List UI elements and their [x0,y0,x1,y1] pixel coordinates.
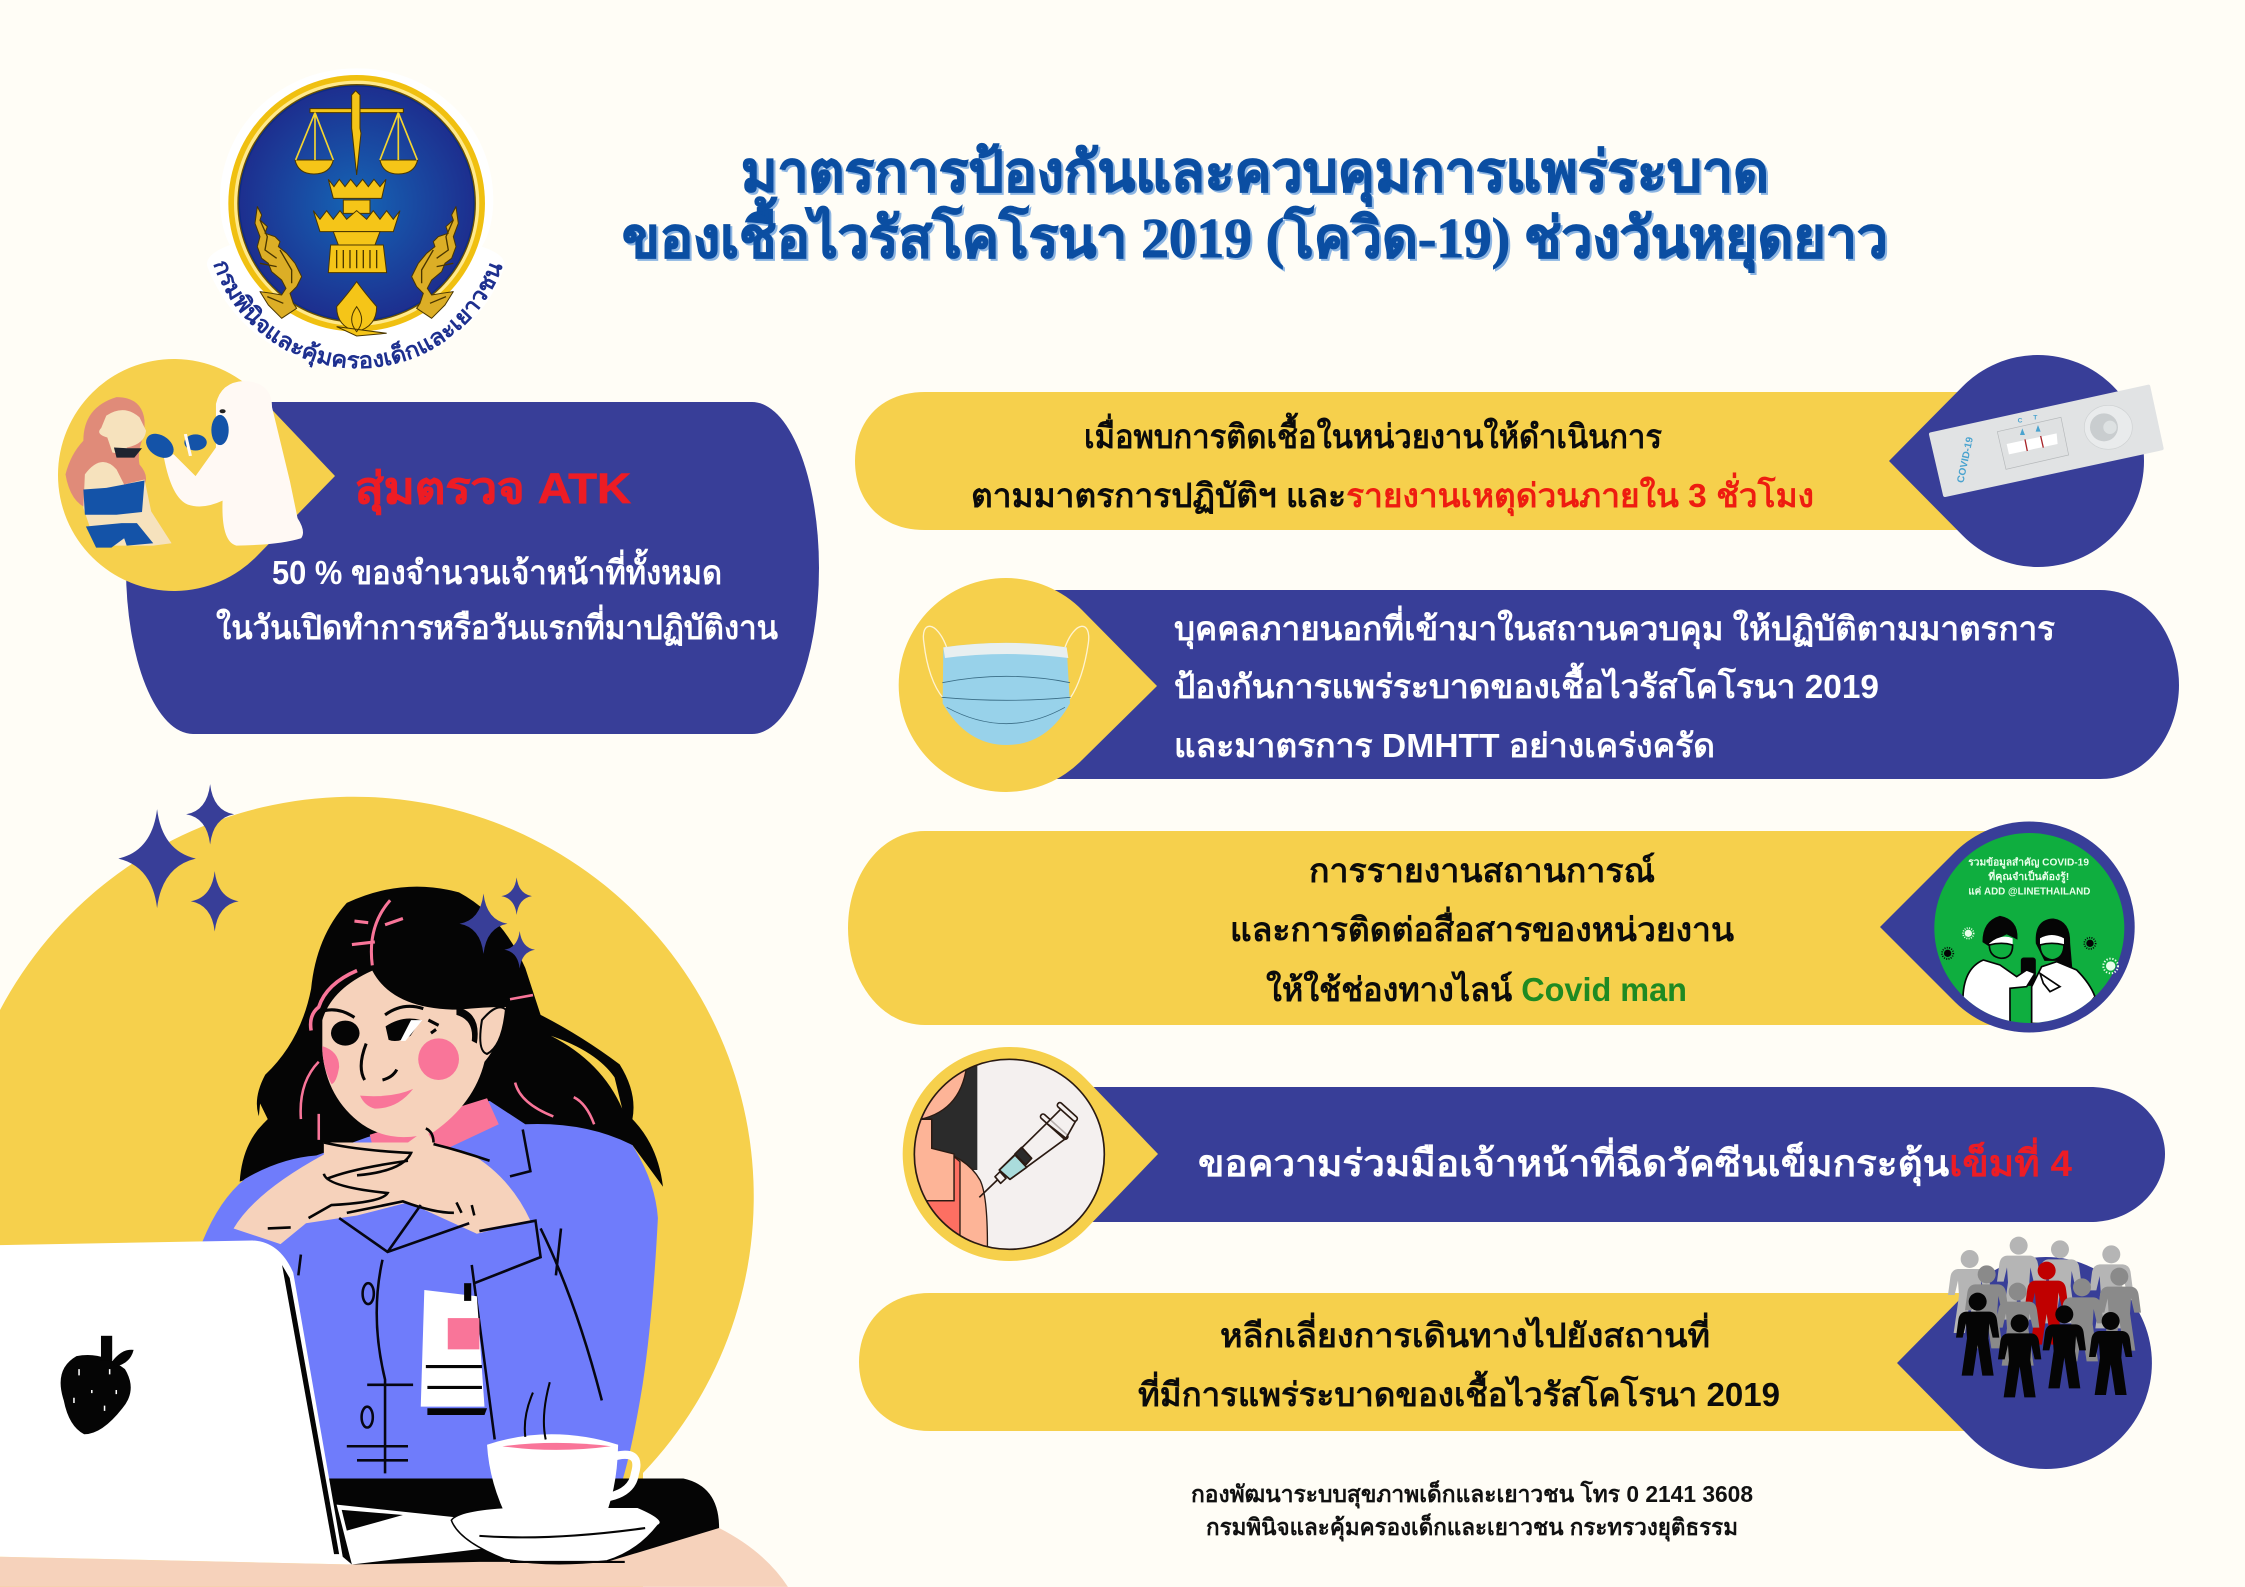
title [622,142,1888,273]
row 2: outsiders DMHTT [899,578,2179,792]
blue pill [1050,590,2179,779]
text block: ที่มีการแพร่ระบาดของเชื้อไวรัสโคโรนา 2019 [1138,1370,1780,1413]
icon: crowd [1948,1237,2141,1397]
collar and shirt lines [298,1129,602,1473]
yellow pill [859,1293,2000,1431]
hands [234,1129,530,1244]
heading: สุ่มตรวจ ATK [355,465,631,516]
icon: LINE poster: รวมข้อมูลสำคัญ COVID-19 [1968,856,2089,869]
laptop lid [0,1240,352,1565]
row 4: booster vaccine [903,1047,2165,1261]
text block: ตามมาตรการปฏิบัติฯ และรายงานเหตุด่วนภายใน 3 ชั่วโมง [971,472,1814,517]
icon: swab test illustration [66,381,303,548]
message text: ขอความร่วมมือเจ้าหน้าที่ฉีดวัคซีนเข็มกระตุ้น เข็มที่ 4 [1198,1137,2072,1187]
sparkle stars [118,784,535,969]
neck and face [370,1098,499,1148]
text block: การรายงานสถานการณ์ [1309,852,1655,889]
cheeks [418,1038,459,1080]
icon: ATK test kit: COVID-19 [1955,436,1976,484]
yellow teardrop [903,1047,1158,1261]
body text [216,548,778,646]
row 5: avoid outbreak areas [859,1237,2152,1469]
footer contact [1191,1479,1753,1542]
hair [240,887,663,1187]
text block [971,412,1814,517]
yellow teardrop [899,578,1157,792]
text block: และมาตรการ DMHTT อย่างเคร่งครัด [1174,727,1715,764]
text block: ให้ใช้ช่องทางไลน์ Covid man [1266,970,1687,1008]
eyes, nose and mouth [331,1021,360,1046]
virus particles [1965,930,1972,937]
text block [1230,852,1734,1008]
icon: LINE poster: ที่คุณจำเป็นต้องรู้! [1988,869,2069,884]
blue teardrop [1897,1257,2152,1469]
strawberry logo [61,1355,131,1434]
text block [1138,1312,1780,1413]
row 3: reporting via LINE [848,821,2135,1032]
text block: ป้องกันการแพร่ระบาดของเชื้อไวรัสโคโรนา 2019 [1174,662,1879,705]
table [0,1528,788,1587]
illustration: woman at laptop [0,784,788,1587]
blue teardrop [1880,821,2135,1032]
blue teardrop [1889,355,2144,567]
keyboard base [306,1479,719,1565]
text block [1174,605,2055,764]
footer contact: กรมพินิจและคุ้มครองเด็กและเยาวชน กระทรวงยุติธรรม [1206,1512,1738,1542]
icon: ATK test kit: T [2033,414,2037,421]
footer contact: กองพัฒนาระบบสุขภาพเด็กและเยาวชน โทร 0 2141 3608 [1191,1479,1753,1509]
blue pill [1090,1087,2165,1222]
ear [480,1007,506,1054]
ID badge [421,1283,487,1415]
title: ของเชื้อไวรัสโคโรนา 2019 (โควิด-19) ช่วงวันหยุดยาว [622,197,1888,273]
icon: face mask [923,626,1089,745]
body text: ในวันเปิดทำการหรือวันแรกที่มาปฏิบัติงาน [216,604,778,646]
yellow pill [848,831,1990,1025]
shirt [202,1101,658,1481]
teardrop: yellow pointer [58,359,335,591]
icon: ATK test kit: C [2018,418,2023,425]
yellow circle behind character [0,797,754,1587]
panel: ATK random testing [58,359,819,734]
icon: LINE poster [1934,833,2124,1023]
text block: หลีกเลี่ยงการเดินทางไปยังสถานที่ [1220,1312,1710,1354]
pink hair strands [301,995,594,1140]
row 1: report within 3 hours [855,355,2162,567]
icon: ATK test kit [1931,387,2162,495]
coffee cup and saucer [451,1382,660,1564]
body text: 50 % ของจำนวนเจ้าหน้าที่ทั้งหมด [272,548,722,591]
text block: และการติดต่อสื่อสารของหน่วยงาน [1230,906,1734,948]
scales and pedestal [295,91,418,336]
icon: vaccine syringe [910,1059,1104,1257]
text block: บุคคลภายนอกที่เข้ามาในสถานควบคุม ให้ปฏิบัติตามมาตรการ [1174,605,2055,650]
icon: LINE poster: แค่ ADD @LINETHAILAND [1968,886,2090,898]
naga left and right [255,207,458,318]
yellow pill [855,392,1990,530]
text block: เมื่อพบการติดเชื้อในหน่วยงานให้ดำเนินการ [1084,412,1662,455]
title: มาตรการป้องกันและควบคุมการแพร่ระบาด [741,142,1769,207]
logo ribbon text: กรมพินิจและคุ้มครองเด็กและเยาวชน [213,261,502,369]
logo emblem [207,68,504,369]
